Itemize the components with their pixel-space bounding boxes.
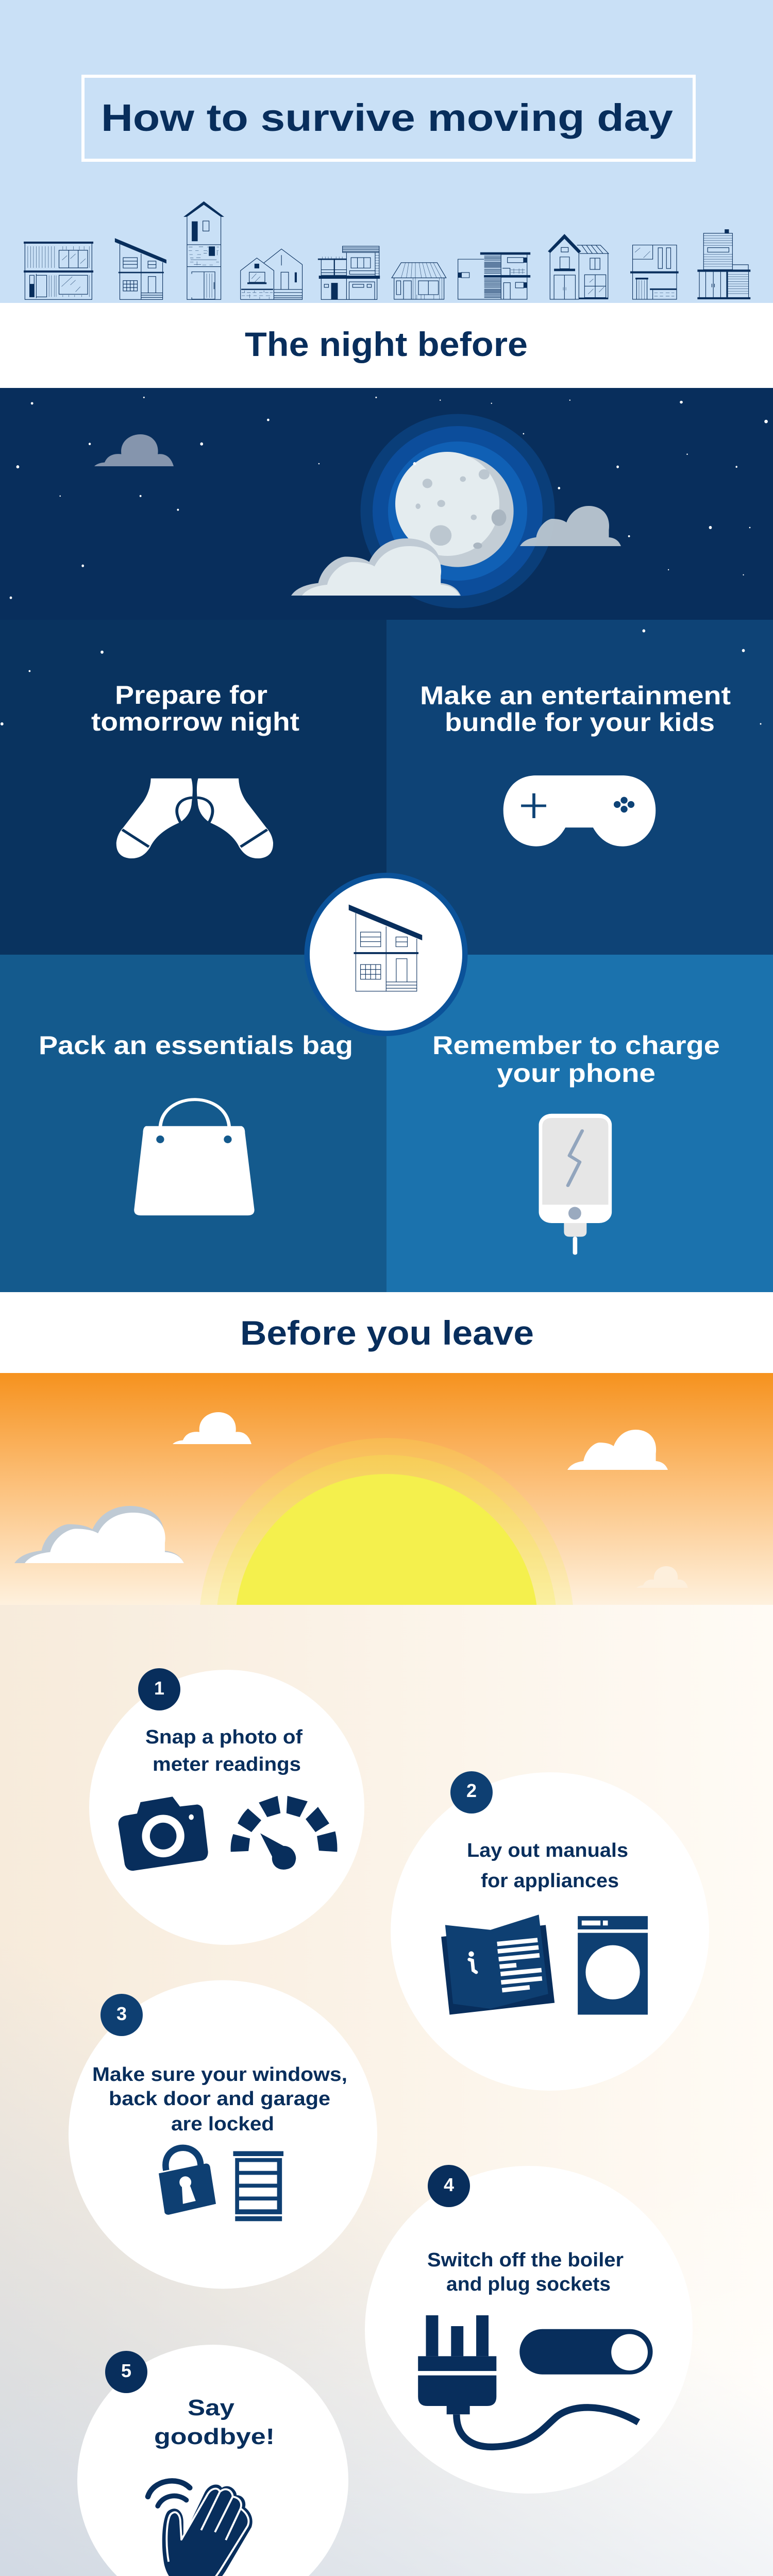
cloud: small top bbox=[173, 1412, 251, 1444]
icon: house bbox=[349, 905, 422, 991]
icon: house 9 bbox=[630, 245, 679, 299]
icon: house 2 bbox=[115, 238, 166, 299]
step 5 bbox=[77, 2345, 348, 2576]
text: Pack an essentials bag bbox=[39, 1031, 353, 1060]
text: Switch off the boiler bbox=[427, 2249, 624, 2271]
icon: house 8 bbox=[548, 234, 609, 299]
text: meter readings bbox=[153, 1754, 301, 1775]
text: for appliances bbox=[481, 1870, 619, 1892]
panel: before you leave steps bbox=[0, 1605, 773, 2576]
icon: bag bbox=[134, 1099, 255, 1215]
panel: charge phone bbox=[386, 955, 773, 1292]
icon: house 7 bbox=[458, 252, 530, 299]
text: bundle for your kids bbox=[445, 708, 715, 737]
number 1: 1 bbox=[154, 1677, 164, 1699]
icon: washing machine bbox=[578, 1916, 648, 2014]
title box bbox=[83, 76, 694, 160]
houses row right bbox=[392, 229, 750, 299]
text: Say bbox=[188, 2395, 235, 2420]
icon: socks bbox=[116, 778, 273, 858]
text: Lay out manuals bbox=[467, 1840, 628, 1861]
step 3 bbox=[69, 1980, 377, 2289]
cloud: right bbox=[567, 1430, 668, 1470]
text: are locked bbox=[171, 2113, 274, 2135]
panel: entertainment bundle bbox=[386, 620, 773, 955]
icon: house 10 bbox=[697, 229, 750, 299]
icon: house 5 bbox=[318, 246, 380, 299]
title: How to survive moving day bbox=[101, 96, 673, 139]
icon: toggle bbox=[519, 2329, 653, 2375]
text: Make sure your windows, bbox=[92, 2064, 347, 2086]
text: Make an entertainment bbox=[420, 681, 731, 710]
icon: sun bbox=[200, 1438, 573, 1605]
cloud: pale bbox=[636, 1566, 688, 1588]
number 4 bbox=[428, 2165, 470, 2207]
number 3: 3 bbox=[116, 2003, 127, 2024]
icon: game controller bbox=[503, 775, 656, 846]
icon: window blind bbox=[233, 2151, 283, 2221]
icon: house 6 bbox=[392, 263, 446, 299]
center badge: house bbox=[304, 873, 468, 1036]
panel: essentials bag bbox=[0, 955, 386, 1292]
icon: manual bbox=[441, 1914, 554, 2014]
icon: camera bbox=[119, 1797, 208, 1871]
step 4 bbox=[365, 2165, 693, 2494]
number 3 bbox=[100, 1994, 143, 2036]
text: Remember to charge bbox=[432, 1031, 720, 1060]
number 5: 5 bbox=[121, 2360, 131, 2381]
icon: house 4 bbox=[241, 249, 303, 299]
houses row left bbox=[24, 201, 380, 299]
step 2 bbox=[391, 1771, 709, 2091]
text: goodbye! bbox=[154, 2424, 275, 2449]
stars bbox=[1, 397, 768, 725]
icon: plug bbox=[418, 2315, 638, 2447]
text: Snap a photo of bbox=[145, 1726, 303, 1748]
panel: header bbox=[0, 0, 773, 303]
text: back door and garage bbox=[109, 2088, 330, 2110]
number 4: 4 bbox=[444, 2174, 454, 2195]
icon: meter bbox=[231, 1796, 337, 1870]
heading: the night before: The night before bbox=[245, 325, 528, 363]
cloud: right of moon bbox=[520, 506, 621, 546]
text: Prepare for bbox=[115, 681, 267, 709]
panel: night sky bbox=[0, 388, 773, 625]
panel: sunrise sky bbox=[0, 1373, 773, 1605]
heading: before you leave: Before you leave bbox=[240, 1314, 534, 1352]
icon: moon bbox=[395, 452, 514, 567]
icon: waving hand bbox=[148, 2481, 253, 2576]
icon: padlock bbox=[159, 2148, 216, 2215]
number 1 bbox=[138, 1668, 180, 1710]
cloud: top left bbox=[94, 434, 174, 466]
cloud: front of moon bbox=[291, 538, 461, 596]
number 2 bbox=[450, 1771, 493, 1814]
text: and plug sockets bbox=[446, 2274, 611, 2295]
cloud: left bbox=[14, 1506, 184, 1563]
text: your phone bbox=[497, 1059, 656, 1088]
number 5 bbox=[105, 2351, 147, 2393]
icon: house 1 bbox=[24, 242, 93, 299]
number 2: 2 bbox=[466, 1780, 477, 1801]
step 1 bbox=[89, 1668, 364, 1945]
panel: prepare for tomorrow night bbox=[0, 620, 386, 955]
text: tomorrow night bbox=[91, 707, 299, 736]
icon: phone bbox=[539, 1114, 612, 1255]
moon glow bbox=[361, 414, 554, 608]
icon: house 3 bbox=[183, 201, 224, 299]
